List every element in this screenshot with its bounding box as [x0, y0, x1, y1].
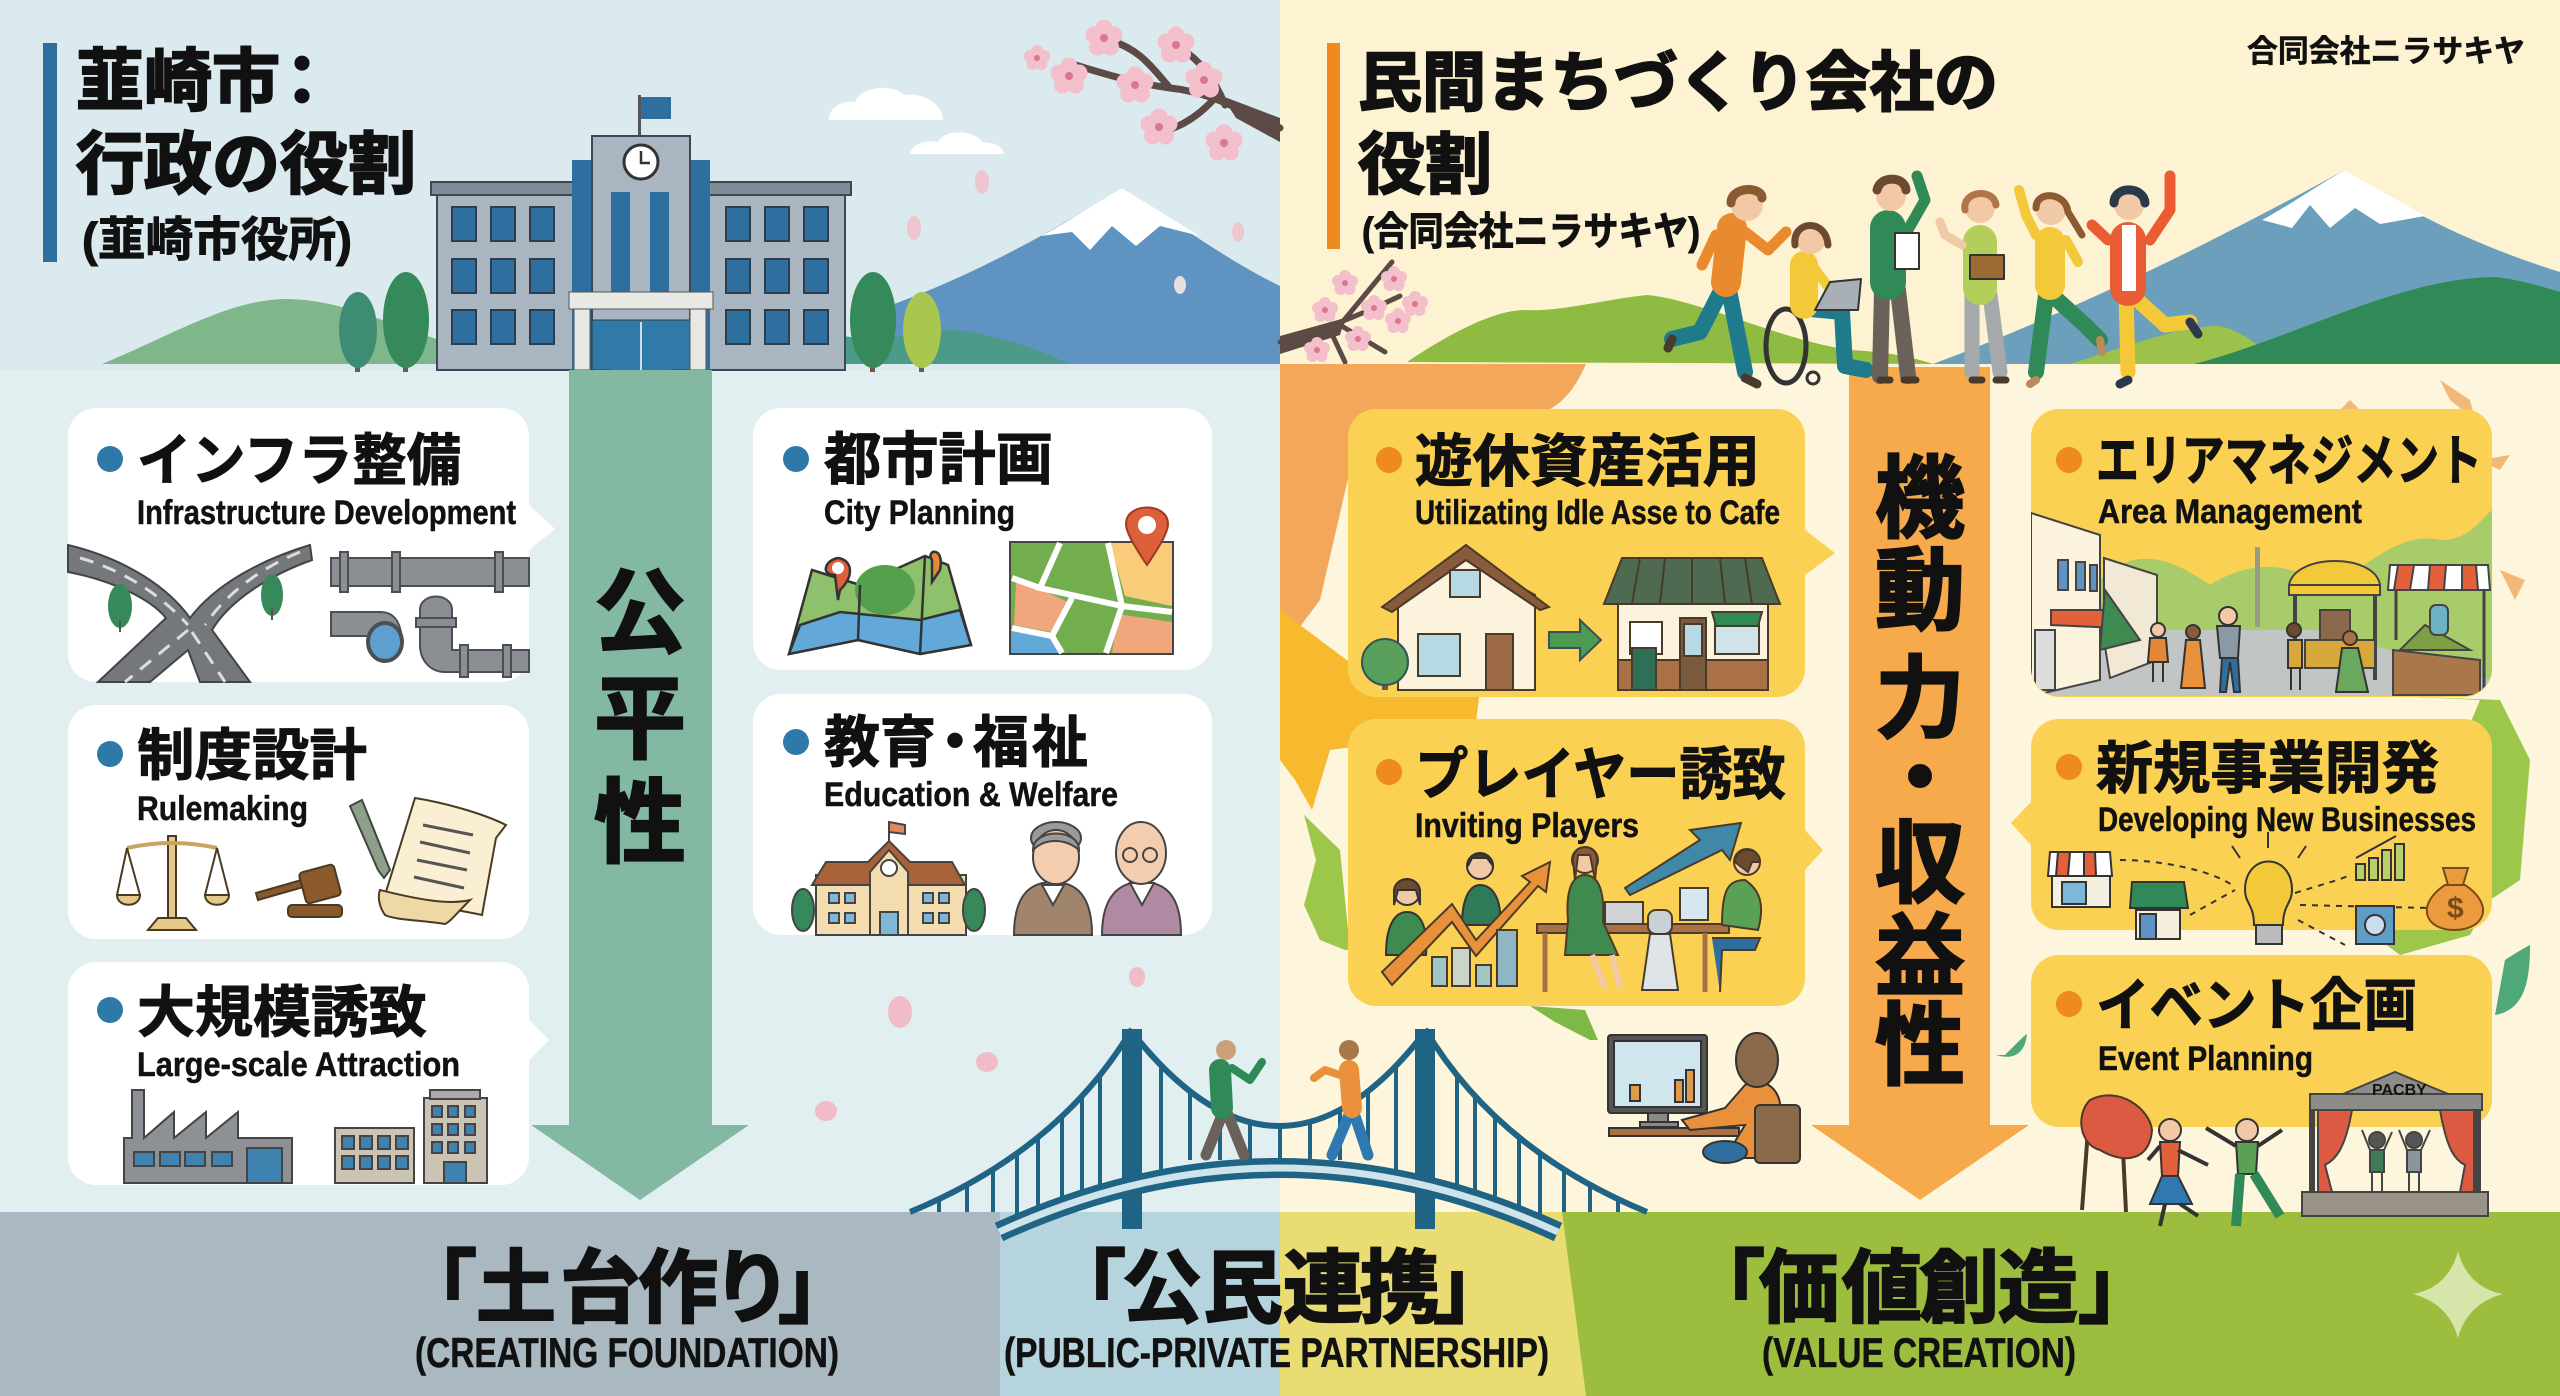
icon: folded map: [789, 552, 971, 654]
label: 公平性: 公: [594, 563, 686, 665]
label: 機動力・収益性: 力: [1875, 650, 1965, 750]
label: creating foundation: [397, 1244, 858, 1376]
left heading: 韮崎市：: [76, 44, 336, 120]
label: 公平性: 平: [594, 669, 686, 771]
icon: money bag: [2427, 868, 2483, 930]
panel: inviting players: [1348, 719, 1823, 1006]
person in orange running: [1668, 189, 1786, 384]
panel: infrastructure development: Infrastructure Development: [137, 494, 516, 532]
petals: [815, 967, 1145, 1121]
person in lime shirt: [1940, 193, 2006, 380]
panel: city planning: 都市計画: [824, 428, 1053, 492]
panel: large-scale attraction: [68, 962, 549, 1185]
icon: meeting at table with robot: [1537, 823, 1761, 992]
icon: suspension bridge: [910, 1029, 1647, 1232]
icon: light bulb with dashed links: [2120, 832, 2430, 945]
label: 機動力・収益性: 益: [1875, 908, 1965, 1008]
left scenery: mountains, clouds and hills: [102, 88, 1280, 364]
icon: sparkle: [2413, 1251, 2503, 1338]
icon: street market scene: [2031, 510, 2492, 696]
label: public-private partnership: [1004, 1244, 1549, 1376]
panel: event planning: [2031, 955, 2492, 1226]
panel: developing new businesses: 新規事業開発: [2096, 737, 2439, 801]
panel: rulemaking: [68, 705, 529, 939]
arrow: equity: [531, 370, 749, 1200]
icon: small bar chart: [2356, 836, 2404, 880]
right heading: 役割: [1358, 128, 1492, 203]
icon: trees beside city hall: [339, 272, 941, 372]
panel: developing new businesses: Developing New Businesses: [2098, 801, 2476, 839]
panel: city planning: City Planning: [824, 494, 1015, 532]
label: 機動力・収益性: 収: [1875, 815, 1965, 915]
person in yellow shirt: [2019, 190, 2102, 384]
icon: zoning map with pin: [1010, 542, 1173, 654]
panel: area management: [2031, 409, 2492, 697]
icon: school: [792, 821, 985, 935]
panel: utilizing idle assets: 遊休資産活用: [1415, 430, 1760, 494]
person in green jacket: [1876, 176, 1925, 380]
icon: gavel: [256, 864, 342, 917]
bottom band: three sections: [0, 1212, 2560, 1396]
icon: money bag: $: [2447, 892, 2464, 925]
panel: rulemaking: Rulemaking: [137, 790, 308, 828]
icon: house: [1382, 545, 1549, 690]
label: 公平性: 性: [594, 773, 686, 875]
right heading: 民間まちづくり会社の: [1358, 46, 1998, 119]
label: value creation: 「価値創造」: [1685, 1244, 2158, 1333]
panel: infrastructure development: [68, 408, 555, 682]
left heading: (韮崎市役所): [82, 213, 352, 266]
icon: rising arrow chart with buildings: [1382, 862, 1550, 986]
panel: inviting players: プレイヤー誘致: [1415, 743, 1786, 807]
panel: education and welfare: 教育・福祉: [824, 711, 1088, 774]
person in wheelchair: [1766, 224, 1866, 384]
label: value creation: [1685, 1244, 2158, 1376]
icon: elderly woman: [1014, 822, 1092, 935]
right heading: (合同会社ニラサキヤ): [1362, 211, 1700, 254]
person in red jacket: [2092, 176, 2198, 384]
icon: person on bridge left: [1206, 1040, 1262, 1155]
icon: stage: [2302, 1072, 2488, 1216]
panel: developing new businesses: [2011, 719, 2492, 945]
icon: stage: PACBY: [2372, 1082, 2427, 1099]
panel: education and welfare: [753, 694, 1212, 935]
icon: pipes: [331, 552, 529, 677]
panel: city planning: [753, 408, 1212, 670]
icon: city hall building: [431, 95, 851, 370]
panel: education and welfare: Education & Welfare: [824, 776, 1118, 814]
icon: scales: [117, 836, 229, 930]
icon: arrow from house to cafe: [1549, 620, 1601, 660]
label: 機動力・収益性: 動: [1875, 542, 1965, 642]
icon: person working at computer: [1608, 1033, 1800, 1163]
icon: pen: [350, 800, 390, 878]
label: value creation: (VALUE CREATION): [1762, 1329, 2076, 1376]
icon: cafe: [1604, 558, 1780, 690]
icon: group of citizens: [1668, 176, 2198, 384]
icon: elderly man: [1102, 822, 1181, 935]
icon: factory: [124, 1090, 292, 1183]
panel: area management: Area Management: [2098, 493, 2362, 531]
icon: road junction: [68, 545, 312, 682]
icon: two shops: [2048, 852, 2188, 939]
icon: cheering boy: [2206, 1119, 2282, 1226]
panel: event planning: イベント企画: [2096, 974, 2417, 1038]
label: public-private partnership: 「公民連携」: [1046, 1244, 1513, 1333]
icon: office buildings: [335, 1090, 487, 1183]
icon: cherry branch left: [907, 20, 1280, 294]
left heading: [43, 43, 416, 266]
icon: market stalls: [2289, 561, 2490, 695]
icon: scroll: [379, 798, 506, 924]
right scenery: mountains and hills: [1407, 170, 2560, 364]
panel: utilizing idle assets: [1348, 409, 1835, 697]
label: public-private partnership: (PUBLIC-PRIVATE PARTNERSHIP): [1004, 1329, 1549, 1376]
panel: infrastructure development: インフラ整備: [137, 429, 461, 492]
decoration: colored splashes on right half: [1280, 364, 2530, 1057]
label: 公平性: [594, 563, 686, 875]
icon: dancing girl: [2148, 1119, 2208, 1226]
panel: large-scale attraction: 大規模誘致: [137, 981, 427, 1044]
panel: event planning: Event Planning: [2098, 1040, 2313, 1078]
label: creating foundation: 「土台作り」: [397, 1244, 858, 1333]
label: 機動力・収益性: 機: [1875, 450, 1965, 550]
label: 機動力・収益性: 性: [1875, 997, 1965, 1097]
right heading: [1327, 43, 1998, 254]
icon: gear box: [2356, 906, 2394, 944]
icon: cherry branch right: [1280, 262, 1428, 362]
icon: tree: [1362, 639, 1408, 690]
icon: red banner: [2081, 1095, 2152, 1212]
label: creating foundation: (CREATING FOUNDATION): [415, 1329, 839, 1376]
panel: utilizing idle assets: Utilizating Idle Asse to Cafe: [1415, 494, 1780, 532]
arrow: agility and profitability: [1811, 367, 2029, 1200]
icon: person on bridge right: [1314, 1040, 1368, 1155]
left heading: 行政の役割: [76, 127, 416, 203]
icon: two business people: [1386, 853, 1500, 955]
icon: people in market: [2148, 607, 2368, 692]
panel: rulemaking: 制度設計: [137, 724, 367, 787]
company name: 合同会社ニラサキヤ: [2247, 34, 2525, 69]
panel: large-scale attraction: Large-scale Attraction: [137, 1046, 460, 1084]
panel: inviting players: Inviting Players: [1415, 807, 1639, 845]
label: 機動力・収益性: [1875, 450, 1965, 1097]
